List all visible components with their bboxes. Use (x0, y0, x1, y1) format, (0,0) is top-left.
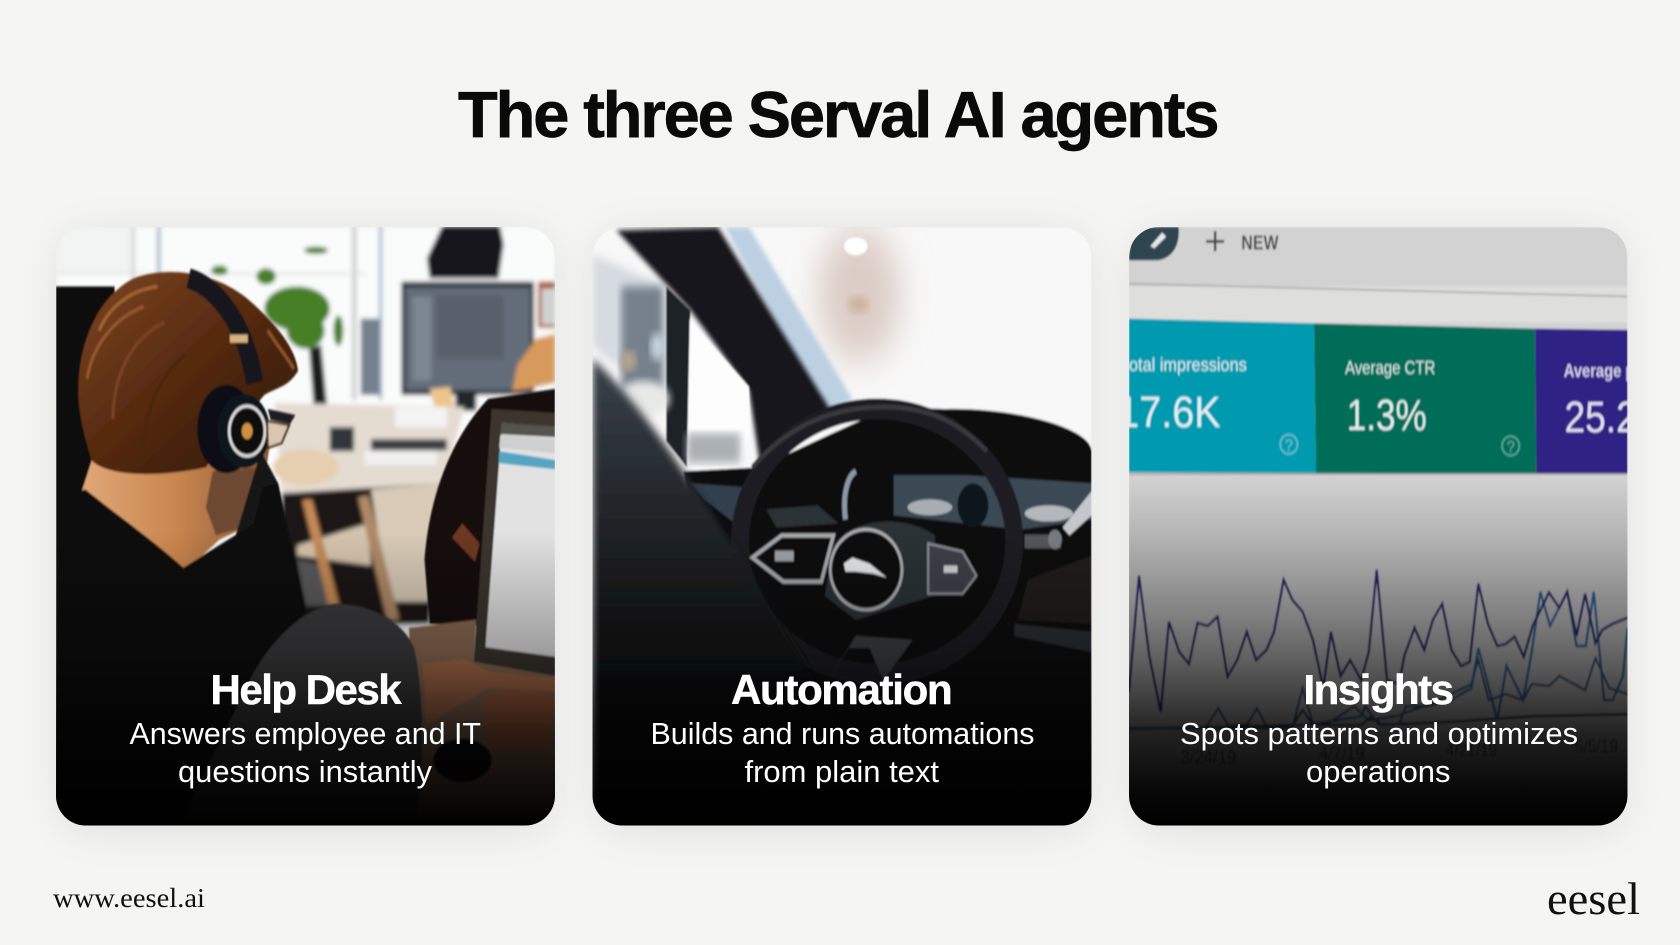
description: Automation: from plain text (744, 754, 939, 789)
description: Help Desk (130, 716, 481, 789)
description: Help Desk: Answers employee and IT (130, 716, 481, 751)
heading: Help Desk: Help Desk (210, 666, 402, 713)
description: Automation (650, 716, 1034, 789)
photo: analytics dashboard on a screen: Average CTR (1345, 357, 1435, 378)
panel: Help Desk (56, 227, 555, 831)
description: Insights: Spots patterns and optimizes (1180, 716, 1578, 751)
panel: Insights (1117, 227, 1637, 831)
photo: analytics dashboard on a screen: NEW (1241, 231, 1279, 254)
photo: analytics dashboard on a screen: ? (1285, 437, 1293, 455)
logo: eesel wordmark: eesel (1547, 873, 1640, 924)
heading: Insights: Insights (1304, 666, 1453, 713)
photo: person with headphones at a desk (56, 227, 555, 826)
panel: Automation (592, 226, 1092, 831)
photo: analytics dashboard on a screen: 1.3% (1347, 390, 1427, 440)
photo: analytics dashboard on a screen (1117, 227, 1637, 826)
heading: Automation: Automation (731, 666, 951, 713)
photo: analytics dashboard on a screen: 4/7/19 (1319, 742, 1365, 764)
title: The three Serval AI agents (458, 78, 1217, 151)
photo: analytics dashboard on a screen: otal impressions (1129, 354, 1247, 375)
photo: self-driving car interior with steering wheel (592, 226, 1092, 825)
description: Insights (1180, 716, 1578, 789)
photo: analytics dashboard on a screen: 3/24/19 (1180, 746, 1236, 768)
photo: analytics dashboard on a screen: 25.2 (1564, 392, 1637, 442)
description: Automation: Builds and runs automations (650, 716, 1034, 751)
photo: analytics dashboard on a screen: 5/5/19 (1575, 735, 1618, 757)
photo: analytics dashboard on a screen: 17.6K (1117, 387, 1221, 437)
photo: analytics dashboard on a screen: ? (1507, 439, 1515, 457)
website url: www.eesel.ai (53, 883, 205, 913)
photo: analytics dashboard on a screen: 4/21/19 (1446, 739, 1497, 761)
description: Help Desk: questions instantly (178, 754, 432, 789)
description: Insights: operations (1306, 754, 1450, 789)
